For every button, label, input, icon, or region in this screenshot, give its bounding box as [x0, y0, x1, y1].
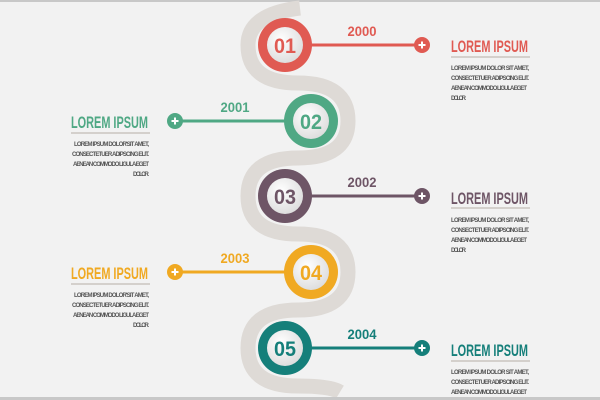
snake path [248, 8, 348, 392]
step 05: 2004 [348, 326, 377, 342]
step 05: AENEAN COMMODO LIGULA EGET [451, 390, 527, 396]
step 02: 2001 [220, 99, 250, 115]
step 02: 02 [300, 111, 322, 134]
step 04: 2003 [220, 250, 250, 266]
step 05: CONSECTETUER ADIPSCING ELIT. [451, 380, 529, 386]
step 01: 2000 [348, 23, 377, 39]
step 05: 05 [274, 338, 296, 361]
step 01: DOLOR. [451, 96, 467, 102]
step 03: AENEAN COMMODO LIGULA EGET [451, 238, 527, 244]
step 01: LOREM IPSUM DOLOR SIT AMET, [451, 66, 529, 72]
step 04 [71, 245, 338, 329]
step 01: CONSECTETUER ADIPSCING ELIT. [451, 76, 529, 82]
step 03: LOREM IPSUM DOLOR SIT AMET, [451, 218, 529, 224]
step 03 [258, 169, 530, 254]
step 02 [71, 94, 338, 178]
step 02: LOREM IPSUM [71, 113, 148, 132]
step 02: DOLOR. [133, 172, 149, 178]
step 04: DOLOR. [133, 323, 149, 329]
step 04: LOREM IPSUM [71, 264, 148, 283]
step 03: 2002 [348, 174, 377, 190]
step 04: AENEAN COMMODO LIGULA EGET [73, 313, 149, 319]
step 04: LOREM IPSUM DOLOR'SIT AMET, [74, 293, 149, 299]
step 05: LOREM IPSUM [451, 341, 528, 360]
step 03: LOREM IPSUM [451, 189, 528, 208]
step 01: LOREM IPSUM [451, 37, 528, 56]
step 04: 04 [300, 262, 322, 285]
step 05: LOREM IPSUM DOLOR SIT AMET, [451, 370, 529, 376]
step 01: 01 [274, 35, 296, 58]
step 04: CONSECTETUER ADIPSCING ELIT. [72, 303, 149, 309]
step 02: LOREM IPSUM DOLOR'SIT AMET, [74, 142, 149, 148]
step 02: CONSECTETUER ADIPSCING ELIT. [72, 152, 149, 158]
step 01: AENEAN COMMODO LIGULA EGET [451, 86, 527, 92]
step 02: AENEAN COMMODO LIGULA EGET [73, 162, 149, 168]
step 03: DOLOR. [451, 248, 467, 254]
step 01 [258, 18, 530, 102]
step 03: 03 [274, 186, 296, 209]
step 03: CONSECTETUER ADIPSCING ELIT. [451, 228, 529, 234]
step 05 [258, 321, 530, 396]
